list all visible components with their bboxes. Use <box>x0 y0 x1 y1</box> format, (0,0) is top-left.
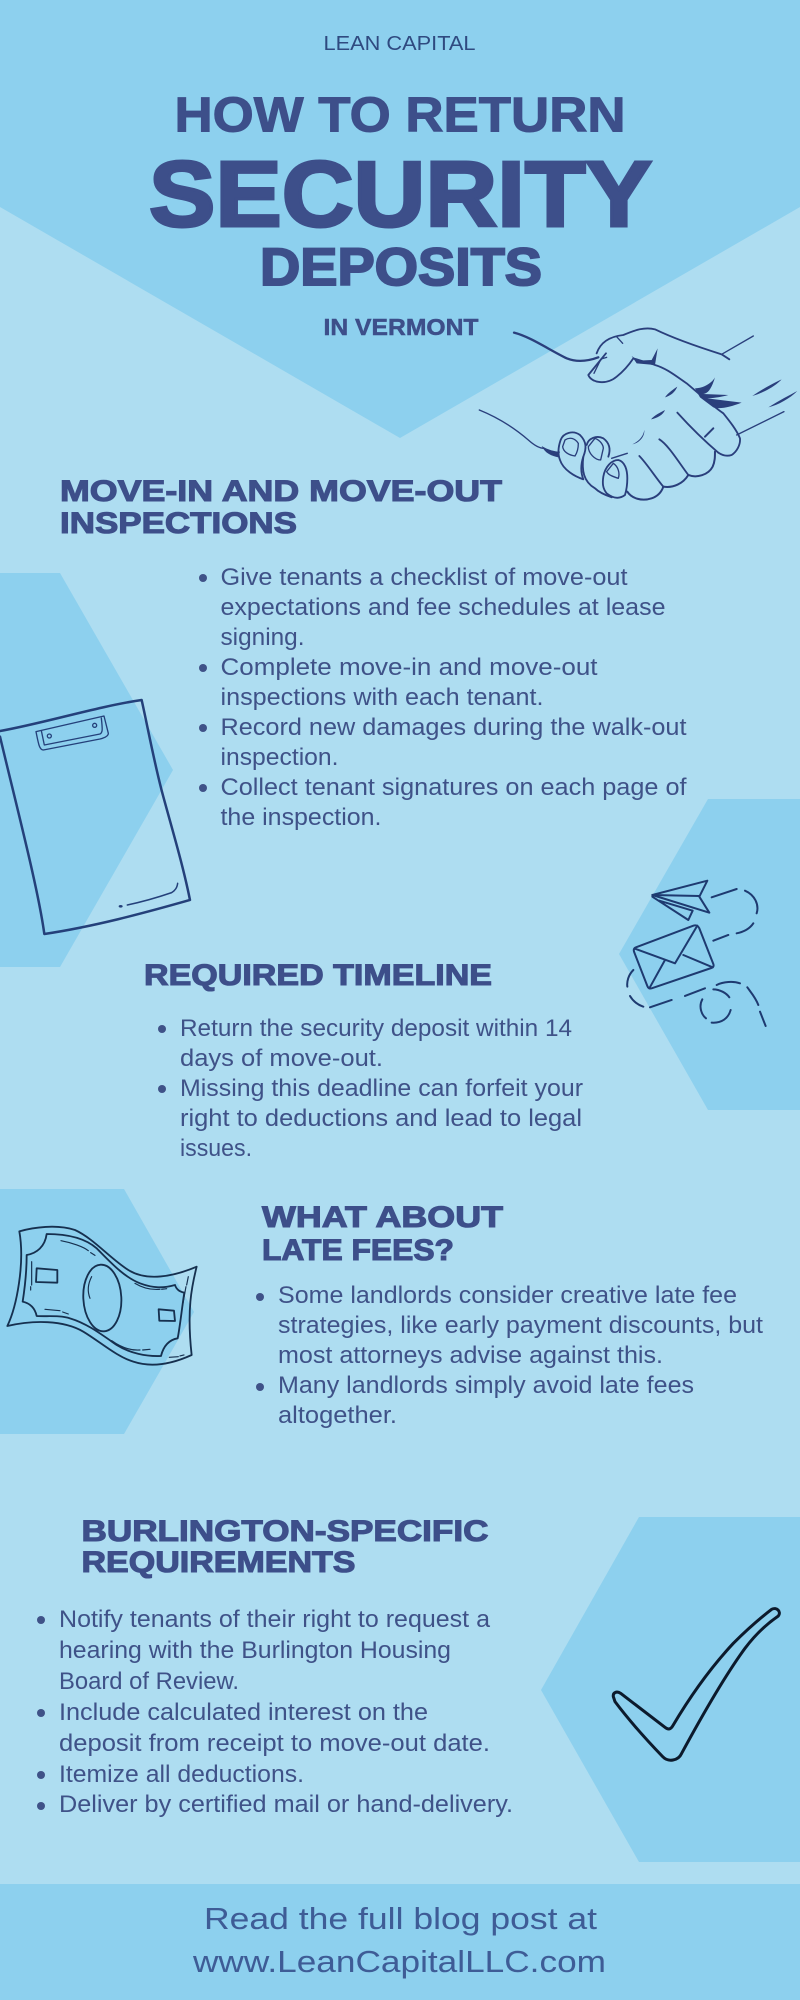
bullet list: Deliver by certified mail or hand-delivery. <box>59 1791 513 1818</box>
footer call to action: Read the full blog post at <box>204 1901 597 1936</box>
icon: handshake <box>479 328 797 500</box>
footer call to action: www.LeanCapitalLLC.com <box>192 1944 606 1979</box>
icon: clipboard <box>0 700 190 934</box>
bullet list: Include calculated interest on the <box>59 1699 428 1726</box>
bullet list: inspections with each tenant. <box>220 684 544 711</box>
bullet list: hearing with the Burlington Housing <box>59 1637 451 1664</box>
heading: BURLINGTON-SPECIFIC <box>82 1515 488 1548</box>
title: IN VERMONT <box>324 314 479 340</box>
bullet list: most attorneys advise against this. <box>278 1342 663 1369</box>
heading <box>262 1201 503 1267</box>
bullet list <box>37 1606 513 1818</box>
heading: WHAT ABOUT <box>262 1201 503 1234</box>
footer band <box>0 1884 800 2000</box>
bullet list: Board of Review. <box>59 1668 239 1695</box>
heading: REQUIRED TIMELINE <box>144 959 492 992</box>
heading: INSPECTIONS <box>60 507 297 540</box>
icon: paper plane and envelope <box>627 881 766 1026</box>
bullet list: deposit from receipt to move-out date. <box>59 1730 490 1757</box>
bullet list: the inspection. <box>220 804 382 831</box>
section: required timeline <box>144 959 583 1162</box>
brand name: LEAN CAPITAL <box>324 33 476 55</box>
bullet list: Give tenants a checklist of move-out <box>220 564 628 591</box>
heading: MOVE-IN AND MOVE-OUT <box>60 475 502 508</box>
bullet list: Collect tenant signatures on each page of <box>220 774 687 801</box>
hexagon: clipboard backdrop <box>0 573 173 967</box>
bullet list: days of move-out. <box>180 1045 383 1072</box>
bullet list: Complete move-in and move-out <box>220 654 598 681</box>
bullet list: right to deductions and lead to legal <box>180 1105 582 1132</box>
bullet list: Some landlords consider creative late fee <box>278 1282 737 1309</box>
bullet list: Many landlords simply avoid late fees <box>278 1372 694 1399</box>
icon: check mark <box>613 1609 779 1760</box>
section: what about late fees <box>256 1201 763 1429</box>
bullet list: Notify tenants of their right to request a <box>59 1606 491 1633</box>
hexagon: money backdrop <box>0 1189 194 1434</box>
footer call to action <box>192 1901 606 1979</box>
title: DEPOSITS <box>260 238 542 297</box>
bullet list: Record new damages during the walk-out <box>220 714 687 741</box>
heading <box>60 475 502 540</box>
heading: LATE FEES? <box>262 1234 454 1267</box>
bullet list: strategies, like early payment discounts, but <box>278 1312 763 1339</box>
bullet list <box>256 1282 763 1429</box>
header chevron background <box>0 0 800 438</box>
bullet list: signing. <box>220 624 304 651</box>
bullet list: Return the security deposit within 14 <box>180 1015 572 1042</box>
section: burlington-specific requirements <box>37 1515 513 1818</box>
bullet list: expectations and fee schedules at lease <box>220 594 666 621</box>
bullet list <box>199 564 687 831</box>
bullet list: Missing this deadline can forfeit your <box>180 1075 583 1102</box>
bullet list: inspection. <box>220 744 338 771</box>
bullet list <box>158 1015 583 1162</box>
hexagon: check mark backdrop <box>541 1517 800 1862</box>
hexagon: mail backdrop <box>619 799 800 1110</box>
title <box>149 88 652 340</box>
bullet list: altogether. <box>278 1402 397 1429</box>
heading <box>82 1515 488 1579</box>
title: SECURITY <box>149 142 652 246</box>
heading: REQUIREMENTS <box>82 1546 356 1579</box>
bullet list: Itemize all deductions. <box>59 1761 304 1788</box>
title: HOW TO RETURN <box>174 88 626 142</box>
icon: dollar bill <box>7 1227 197 1365</box>
bullet list: issues. <box>180 1135 252 1162</box>
section: move-in and move-out inspections <box>60 475 687 831</box>
